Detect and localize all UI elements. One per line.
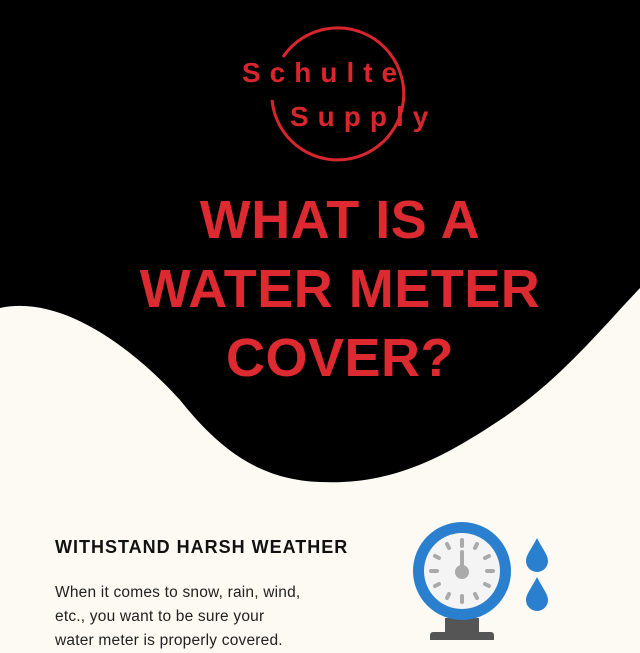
icon: water meter with drops	[413, 522, 548, 640]
logo	[242, 26, 437, 162]
logo text: Schulte: Schulte	[242, 57, 406, 88]
logo text: Supply: Supply	[290, 101, 437, 132]
body text: When it comes to snow, rain, wind, etc., you want to be sure your water meter is properly covered.	[55, 584, 300, 649]
heading: withstand harsh weather: WITHSTAND HARSH WEATHER	[55, 537, 348, 557]
title	[140, 190, 540, 388]
title: WATER METER	[140, 259, 540, 319]
title: WHAT IS A	[200, 190, 480, 250]
title: COVER?	[226, 328, 454, 388]
